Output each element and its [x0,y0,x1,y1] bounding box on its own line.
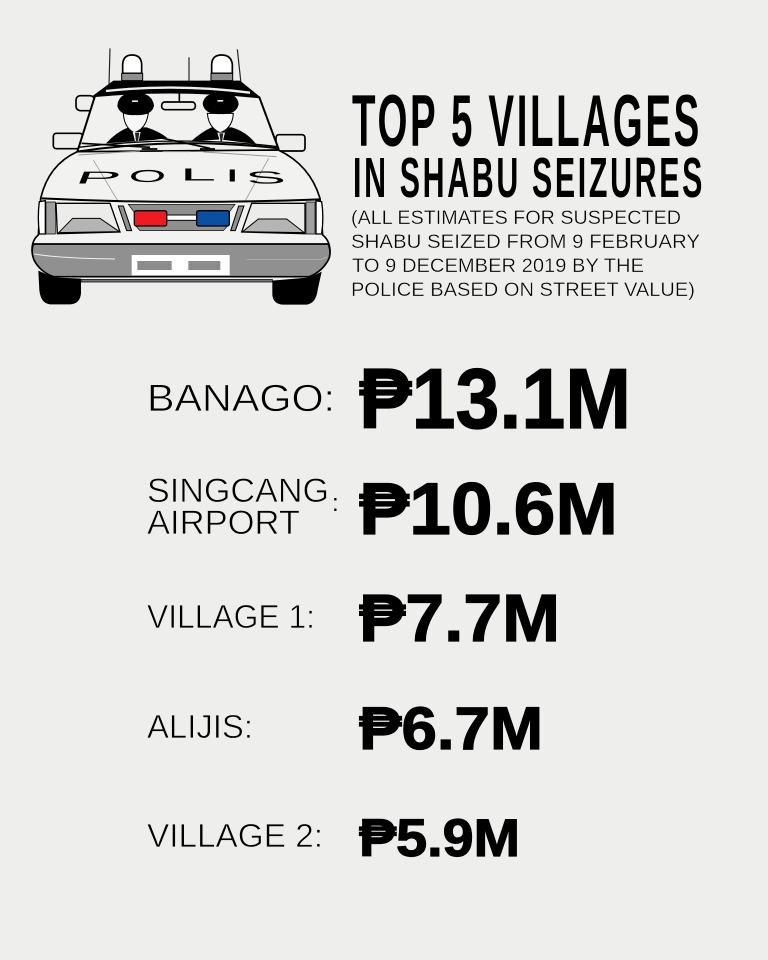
POLIS hood lettering: S [243,168,288,188]
row: Village 1: ₱7.7M [359,581,560,656]
officer left [106,93,167,143]
POLIS hood lettering: O [127,166,168,186]
roof [92,81,261,97]
row: Singcang Airport: ₱10.6M [359,469,618,550]
wing mirrors [53,96,305,151]
row: Village 2: VILLAGE 2: [147,818,323,855]
POLIS hood lettering: I [225,165,240,185]
row: Singcang Airport [147,469,618,550]
row: Village 1 [147,581,560,656]
bumper [32,244,330,277]
rear-view mirror [162,91,195,110]
row: Village 2: ₱5.9M [359,809,520,868]
car body [32,150,330,277]
blue light [197,211,229,226]
windshield [77,92,278,152]
dashboard and wipers [78,137,278,201]
hood line [42,198,320,202]
grille [118,204,244,231]
wheels [38,271,322,305]
row: Banago [147,352,631,447]
row: Singcang Airport: SINGCANG [147,472,329,510]
row: Banago: BANAGO: [147,378,335,420]
antennas [109,48,241,85]
subtitle note: TO 9 DECEMBER 2019 BY THE [352,255,644,277]
row: Alijis: ₱6.7M [359,695,543,762]
icon: police car [32,48,330,305]
row: Singcang Airport: AIRPORT [147,504,300,542]
under-bumper [81,279,272,282]
row: Alijis: ALIJIS: [147,709,253,746]
subtitle note: (ALL ESTIMATES FOR SUSPECTED [351,207,681,229]
headlights [38,201,323,234]
row: Village 2 [147,809,520,868]
roof beacons [122,55,233,81]
POLIS hood lettering [72,165,288,188]
subtitle note [351,207,700,301]
subtitle note: SHABU SEIZED FROM 9 FEBRUARY [351,231,700,253]
POLIS hood lettering: L [180,165,217,185]
officer right [191,93,256,144]
row: Singcang Airport: : [332,490,339,517]
license plate [132,255,230,275]
row: Alijis [147,695,543,762]
subtitle note: POLICE BASED ON STREET VALUE) [351,279,695,301]
row: Village 1: VILLAGE 1: [147,599,315,636]
red light [134,211,167,226]
POLIS hood lettering: P [72,168,125,187]
title [352,81,705,210]
row: Banago: ₱13.1M [359,352,631,447]
